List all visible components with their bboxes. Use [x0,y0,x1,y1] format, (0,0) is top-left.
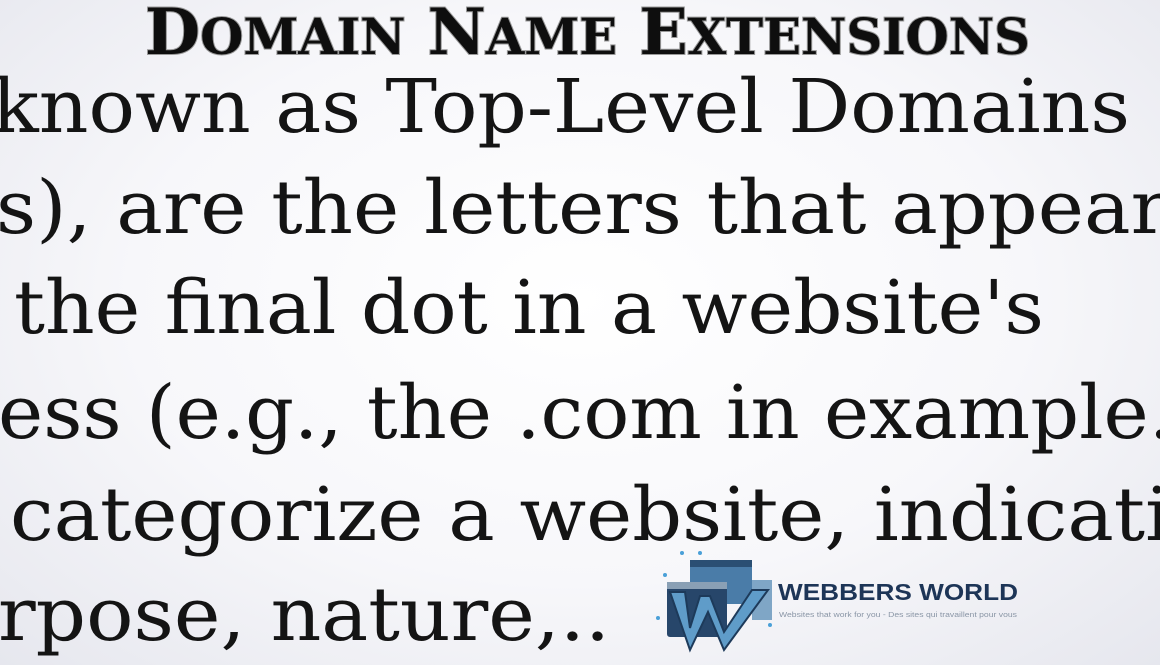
logo: webbers world [656,551,1018,650]
icon: browser windows with W [656,551,772,650]
logo wordmark: WEBBERS WORLD [778,579,1018,605]
body text block: categorize a website, indicati [10,472,1160,558]
body text block: known as Top-Level Domains [0,64,1130,150]
body text block: rpose, nature,.. [0,572,610,658]
body text block: the final dot in a website's [14,265,1044,351]
body text block: ess (e.g., the .com in example. [0,370,1160,456]
body text block: s), are the letters that appear [0,165,1160,251]
logo tagline: Websites that work for you - Des sites qui travaillent pour vous [779,612,1018,619]
